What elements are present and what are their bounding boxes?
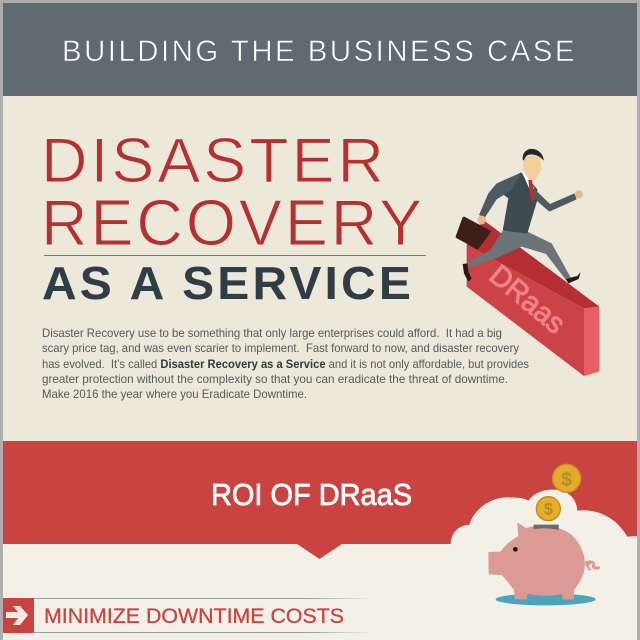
panel: lower background <box>3 441 637 640</box>
text block: introduction: scary price tag, and was even scarier to implement. Fast forward to now, and disaster recovery <box>42 341 519 355</box>
heading: ROI of DRaaS: ROI OF DRaaS <box>211 477 412 512</box>
shirt and tie <box>522 172 534 190</box>
header band <box>3 3 637 96</box>
coin: upper: $ <box>561 469 572 490</box>
text block: introduction: Make 2016 the year where you Eradicate Downtime. <box>42 387 307 401</box>
panel: introduction <box>3 96 637 441</box>
head <box>523 155 541 180</box>
banner: ROI of DRaaS <box>3 441 637 559</box>
illustration: businessman leaping over DRaaS wall <box>457 149 599 376</box>
wall <box>467 220 599 376</box>
wall: DRaas <box>483 258 572 340</box>
section heading: minimize downtime costs: MINIMIZE DOWNTIME COSTS <box>44 605 344 628</box>
rear arm <box>479 173 521 217</box>
illustration: piggy bank <box>430 464 637 640</box>
jacket <box>495 172 537 233</box>
title: disaster recovery: DISASTER <box>41 126 387 196</box>
section heading: minimize downtime costs <box>3 598 374 633</box>
title: disaster recovery: RECOVERY <box>41 186 425 259</box>
icon: arrow box <box>3 598 34 633</box>
text block: introduction: has evolved. It’s called Disaster Recovery as a Service and it is not only affordable, but provides <box>42 357 529 371</box>
text block: introduction <box>42 326 529 401</box>
text block: introduction: greater protection without the complexity so that you can eradicate the threat of downtime. <box>42 372 508 386</box>
coin: lower: $ <box>544 500 554 519</box>
back leg <box>467 231 571 280</box>
pig tail <box>585 560 600 571</box>
hands <box>477 216 486 224</box>
pig eye <box>513 547 518 552</box>
coin slot <box>534 525 559 530</box>
coin: lower <box>536 497 560 521</box>
pig body <box>488 523 585 599</box>
subtitle: as a service: AS A SERVICE <box>42 257 414 309</box>
briefcase <box>457 218 489 248</box>
front arm <box>533 187 577 212</box>
cloud <box>430 490 637 640</box>
heading: building the business case: BUILDING THE BUSINESS CASE <box>62 35 577 68</box>
text block: introduction: Disaster Recovery use to be something that only large enterprises could afford. It had a big <box>42 326 502 340</box>
shoes <box>463 263 472 282</box>
right page edge <box>637 0 640 640</box>
title: disaster recovery <box>41 126 425 259</box>
coin: upper <box>553 464 581 492</box>
puddle <box>496 593 596 605</box>
